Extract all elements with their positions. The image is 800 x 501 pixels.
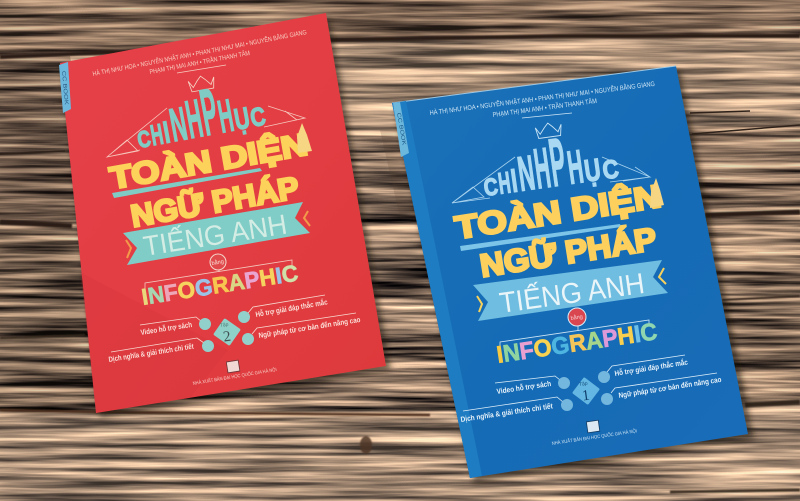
heading: chinh phuc: H [214,89,237,143]
publisher logo [226,360,240,373]
teal bar [112,168,262,198]
tower icon [297,123,312,153]
book shadow [395,70,754,483]
badge: bang: bằng [211,258,224,267]
heading: chinh phuc: H [148,119,166,152]
publisher name: NHÀ XUẤT BẢN ĐẠI HỌC QUỐC GIA HÀ NỘI [551,427,637,447]
volume badge: 1 [581,388,591,404]
feature list: Dịch nghĩa & giải thích chi tiết [460,401,554,424]
ribbon: tieng anh: TIẾNG ANH [497,266,647,320]
feature list: Hỗ trợ giải đáp thắc mắc [255,297,328,319]
spine tab [393,102,409,157]
heading: chinh phuc: P [195,74,223,149]
roof outlines [452,157,650,203]
spine tab: CC BOOK [60,71,69,105]
heading: chinh phuc: H [530,136,554,201]
feature list [108,295,361,364]
heading: ngu phap: NGỮ PHÁP [477,221,659,284]
heading: ngu phap: NGỮ PHÁP [128,169,302,234]
volume badge: Tập [579,381,588,388]
heading: chinh phuc: H [181,89,207,150]
spine tab: CC BOOK [395,112,407,146]
authors: PHẠM THỊ MAI ANH • TRẦN THANH TÂM [149,47,251,76]
authors: HÀ THỊ NHƯ HOA • NGUYỄN NHẬT ANH • PHAN THỊ NHƯ MAI • NGUYỄN BẰNG GIANG [429,79,655,117]
icon: crown [188,74,216,92]
heading: chinh phuc: I [509,162,520,199]
feature list: Video hỗ trợ sách [140,320,193,337]
heading: chinh phuc [128,65,270,162]
feature list: Dịch nghĩa & giải thích chi tiết [108,342,195,364]
volume badge: Tập [220,322,229,329]
feature list: Video hỗ trợ sách [496,379,552,396]
heading: chinh phuc: C [248,101,268,133]
feature list: Ngữ pháp từ cơ bản đến nâng cao [258,315,361,340]
badge: bang [500,308,649,350]
panel: blue book (volume 1) [392,66,754,483]
heading: toan dien: TOÀN DIỆN [107,126,310,196]
paper edge [392,66,676,103]
volume badge: 2 [222,329,232,346]
authors: HÀ THỊ NHƯ HOA • NGUYỄN NHẬT ANH • PHAN THỊ NHƯ MAI • NGUYỄN BẰNG GIANG [92,27,307,78]
feature list: Ngữ pháp từ cơ bản đến nâng cao [618,375,722,400]
book cover [60,13,386,413]
book shadow [62,18,391,418]
ribbon: tieng anh: TIẾNG ANH [141,209,289,262]
publisher name: NHÀ XUẤT BẢN ĐẠI HỌC QUỐC GIA HÀ NỘI [192,366,277,387]
heading: toan dien: TOÀN DIỆN [452,178,664,246]
feature list: Hỗ trợ giải đáp thắc mắc [614,358,688,378]
heading: infographic: INFOGRAPHIC [140,260,300,310]
volume badge [572,377,600,405]
badge: bang: bằng [570,313,583,322]
spine tab [59,62,71,113]
heading: chinh phuc: C [600,153,621,185]
volume badge [213,318,241,346]
roof outlines [107,106,305,157]
heading: chinh phuc: H [496,166,513,201]
heading: chinh phuc [477,117,622,211]
light blue bar [460,224,621,251]
heading: chinh phuc: Ụ [232,102,252,137]
feature list [460,355,722,424]
authors: PHẠM THỊ MAI ANH • TRẦN THANH TÂM [492,95,598,119]
heading: chinh phuc: N [166,96,191,151]
book cover [392,66,748,478]
heading: chinh phuc: C [135,125,153,153]
spine crease [392,101,482,478]
heading: chinh phuc: P [545,124,570,201]
heading: chinh phuc: I [160,114,173,150]
heading: chinh phuc: H [564,139,586,194]
icon: crown [535,121,563,139]
badge: bang [145,254,292,291]
heading: chinh phuc: Ụ [582,152,603,189]
cover facets [80,272,228,413]
panel: red book (volume 2) [59,13,391,418]
publisher logo [586,420,600,433]
tower icon [650,178,664,208]
heading: chinh phuc: N [515,146,538,202]
heading: chinh phuc: C [482,173,500,202]
heading: infographic: INFOGRAPHIC [495,318,659,369]
